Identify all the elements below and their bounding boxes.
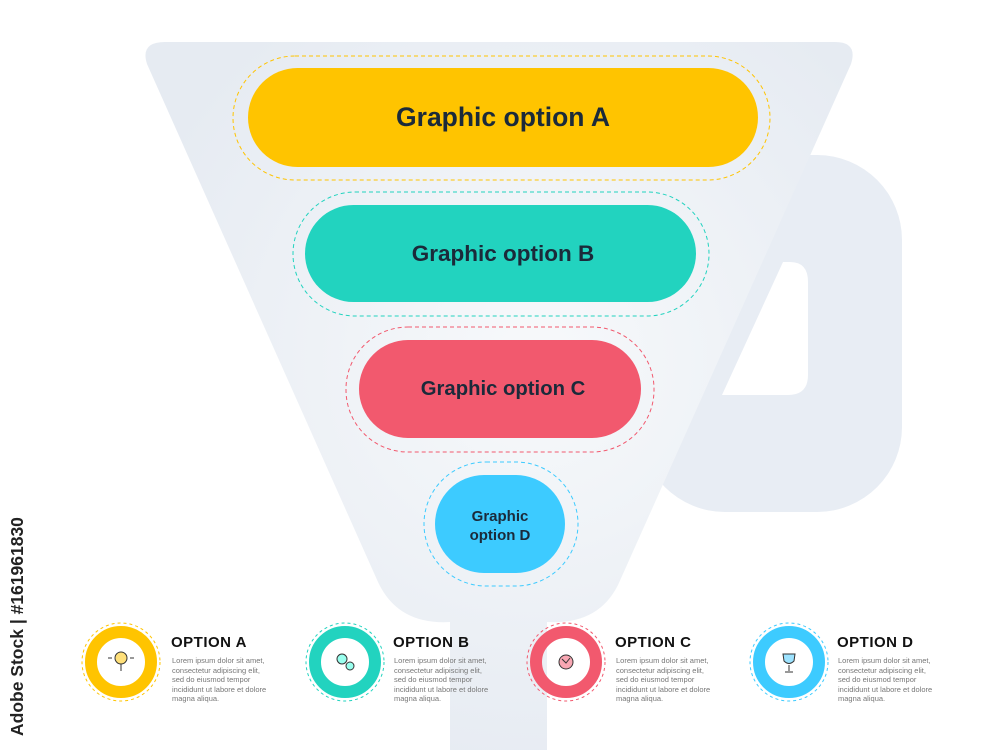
pill B: Graphic option B [412, 241, 594, 266]
pill C [346, 327, 654, 452]
pill A: Graphic option A [396, 102, 610, 132]
funnel background [145, 42, 902, 750]
option B text [393, 634, 488, 703]
icon circle B [306, 623, 384, 701]
pill B [293, 192, 709, 316]
text: OPTION C [615, 634, 692, 651]
pill D [424, 462, 578, 586]
icon circle C [527, 623, 605, 701]
text: OPTION B [393, 634, 470, 651]
pill A [233, 56, 770, 180]
icon circle A [82, 623, 160, 701]
option A text [171, 634, 266, 703]
text: Lorem ipsum dolor sit amet, consectetur adipiscing elit, sed do eiusmod tempor incididunt ut labore et dolore magna aliqua. [172, 656, 266, 703]
text: Lorem ipsum dolor sit amet, consectetur adipiscing elit, sed do eiusmod tempor incididunt ut labore et dolore magna aliqua. [616, 656, 710, 703]
text: OPTION D [837, 634, 914, 651]
pill C: Graphic option C [421, 378, 586, 400]
text: OPTION A [171, 634, 247, 651]
pill D: Graphic [472, 508, 528, 525]
pill D: option D [470, 527, 531, 544]
icon circle D [750, 623, 828, 701]
text: Lorem ipsum dolor sit amet, consectetur adipiscing elit, sed do eiusmod tempor incididunt ut labore et dolore magna aliqua. [394, 656, 488, 703]
side stock id: Adobe Stock | #161961830 [7, 517, 27, 736]
option D text [837, 634, 932, 703]
option C text [615, 634, 710, 703]
text: Lorem ipsum dolor sit amet, consectetur adipiscing elit, sed do eiusmod tempor incididunt ut labore et dolore magna aliqua. [838, 656, 932, 703]
